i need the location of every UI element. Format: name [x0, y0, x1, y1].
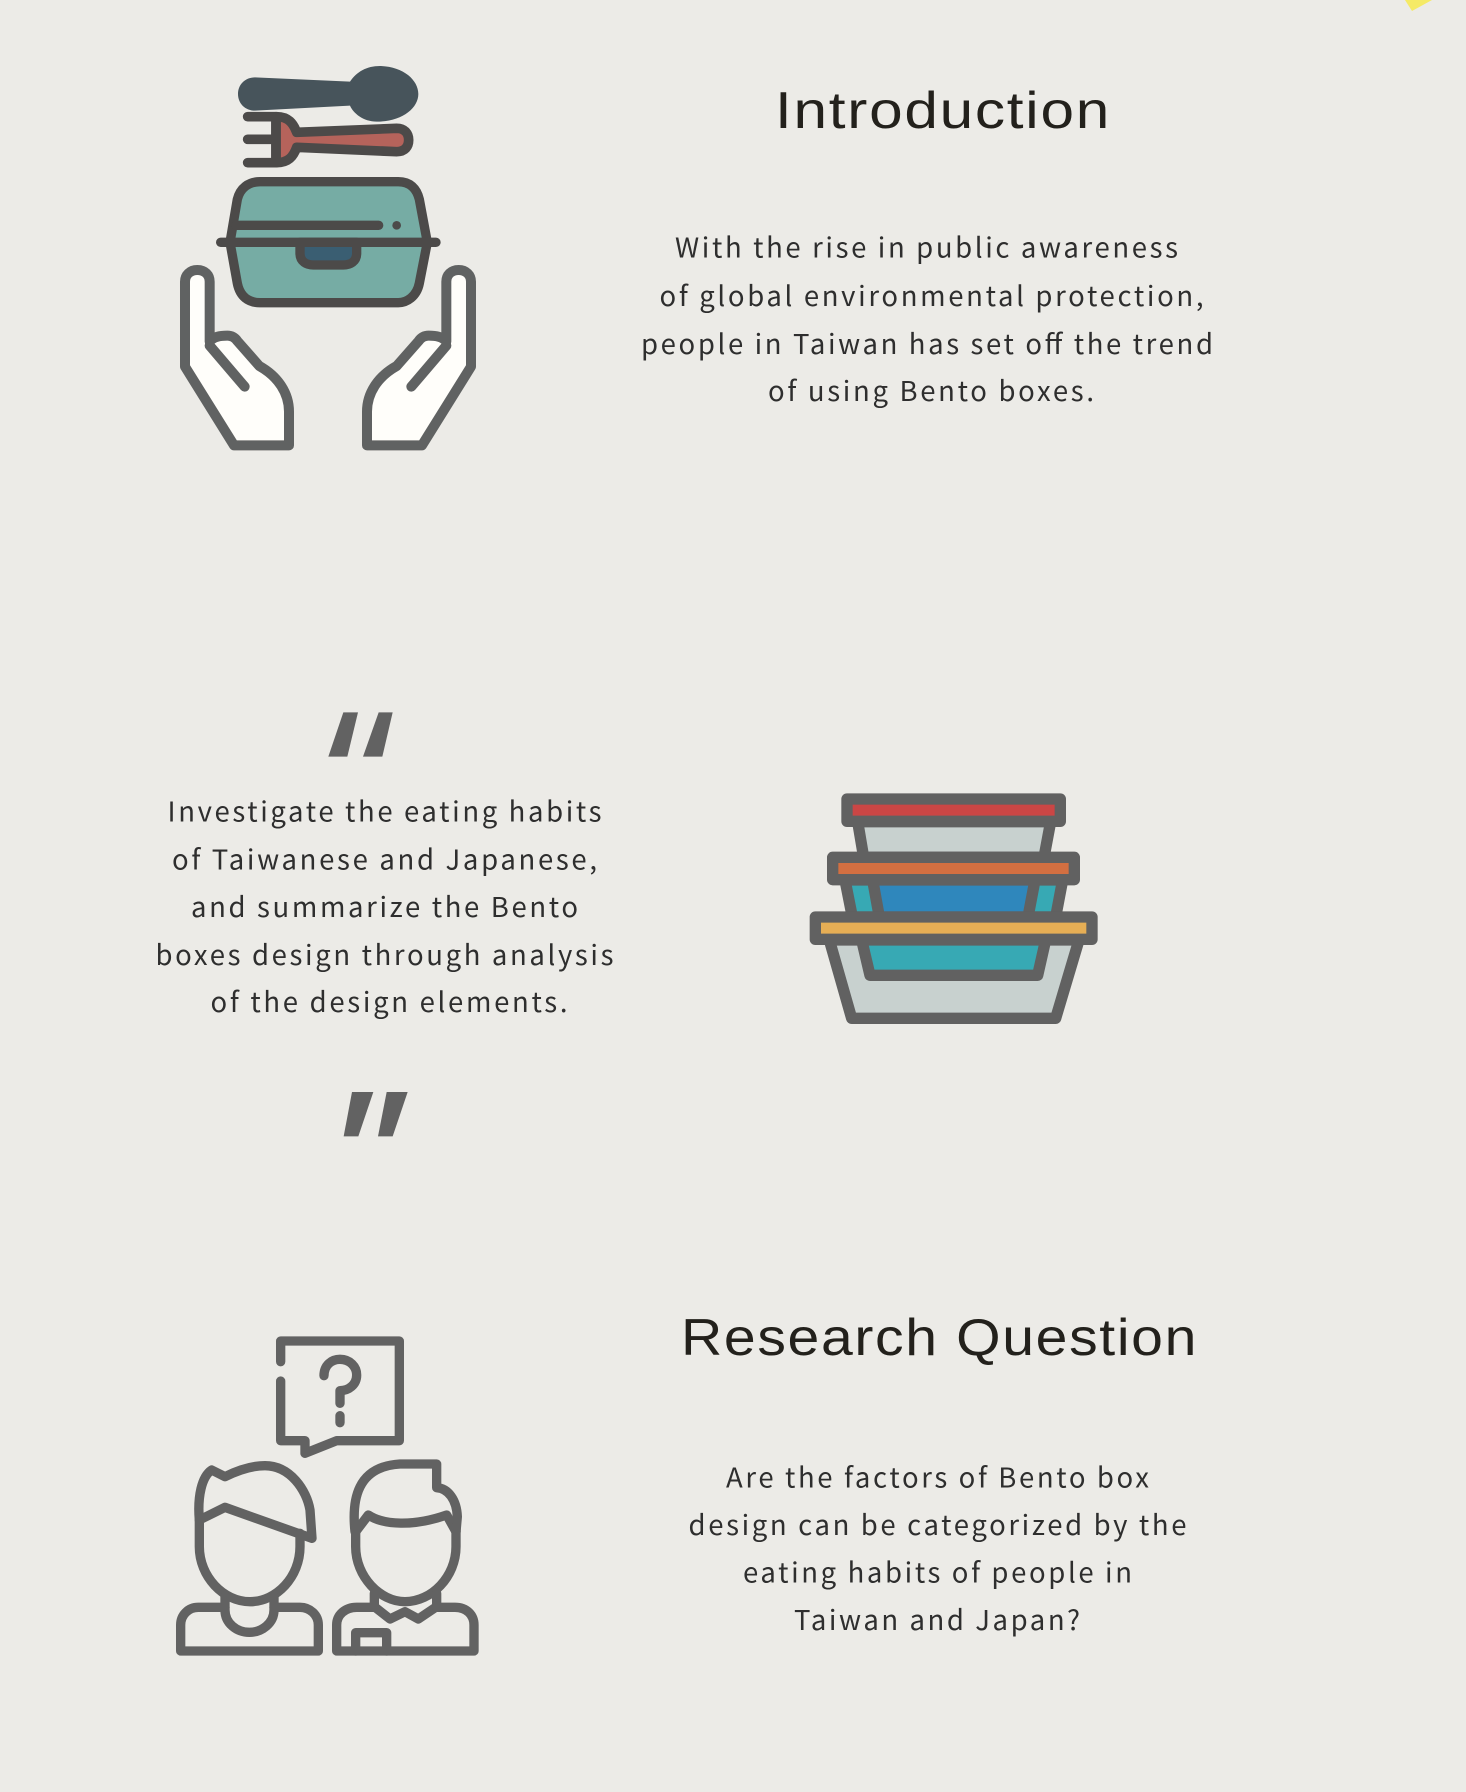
text block: purpose statement: of the design elements.: [210, 980, 568, 1020]
text block: purpose statement: and summarize the Bento: [191, 885, 578, 925]
text block: introduction paragraph: [641, 226, 1213, 409]
icon: hands holding bento box with spoon and fork: [185, 66, 471, 445]
text block: introduction paragraph: people in Taiwan has set off the trend: [641, 322, 1213, 362]
middle container: [833, 857, 1074, 917]
lunch box: [221, 182, 436, 303]
right person: [337, 1464, 474, 1651]
icon: two people with question bubble: [181, 1341, 474, 1651]
text block: introduction paragraph: of using Bento boxes.: [768, 369, 1094, 409]
text block: purpose statement: of Taiwanese and Japanese,: [172, 837, 597, 877]
left person: [181, 1466, 318, 1651]
text block: research question paragraph: design can be categorized by the: [688, 1503, 1186, 1543]
icon: stacked food containers: [815, 799, 1092, 1018]
text block: research question paragraph: Taiwan and Japan?: [794, 1598, 1080, 1638]
text block: introduction paragraph: With the rise in public awareness: [675, 226, 1178, 266]
panel: research purpose quote: [156, 712, 1092, 1136]
question speech bubble: [281, 1341, 399, 1453]
top container: [847, 799, 1060, 857]
corner accent: yellow shape: [1405, 0, 1432, 11]
left hand: [185, 270, 289, 445]
text block: purpose statement: [156, 790, 614, 1020]
fork: [248, 117, 409, 163]
text block: research question paragraph: [688, 1456, 1186, 1638]
panel: research question: [181, 1309, 1198, 1651]
text block: purpose statement: boxes design through analysis: [156, 933, 614, 973]
panel: introduction: [185, 66, 1213, 445]
heading: Introduction: Introduction: [775, 82, 1111, 140]
opening quote mark: [328, 712, 393, 757]
right hand: [367, 270, 471, 445]
text block: research question paragraph: Are the factors of Bento box: [726, 1456, 1149, 1496]
spoon: [238, 66, 418, 122]
text block: introduction paragraph: of global environmental protection,: [660, 274, 1204, 314]
heading: Research Question: Research Question: [681, 1309, 1198, 1367]
text block: research question paragraph: eating habits of people in: [743, 1551, 1132, 1591]
bottom container: [815, 917, 1092, 1018]
text block: purpose statement: Investigate the eating habits: [168, 790, 602, 830]
closing quote mark: [344, 1092, 408, 1136]
